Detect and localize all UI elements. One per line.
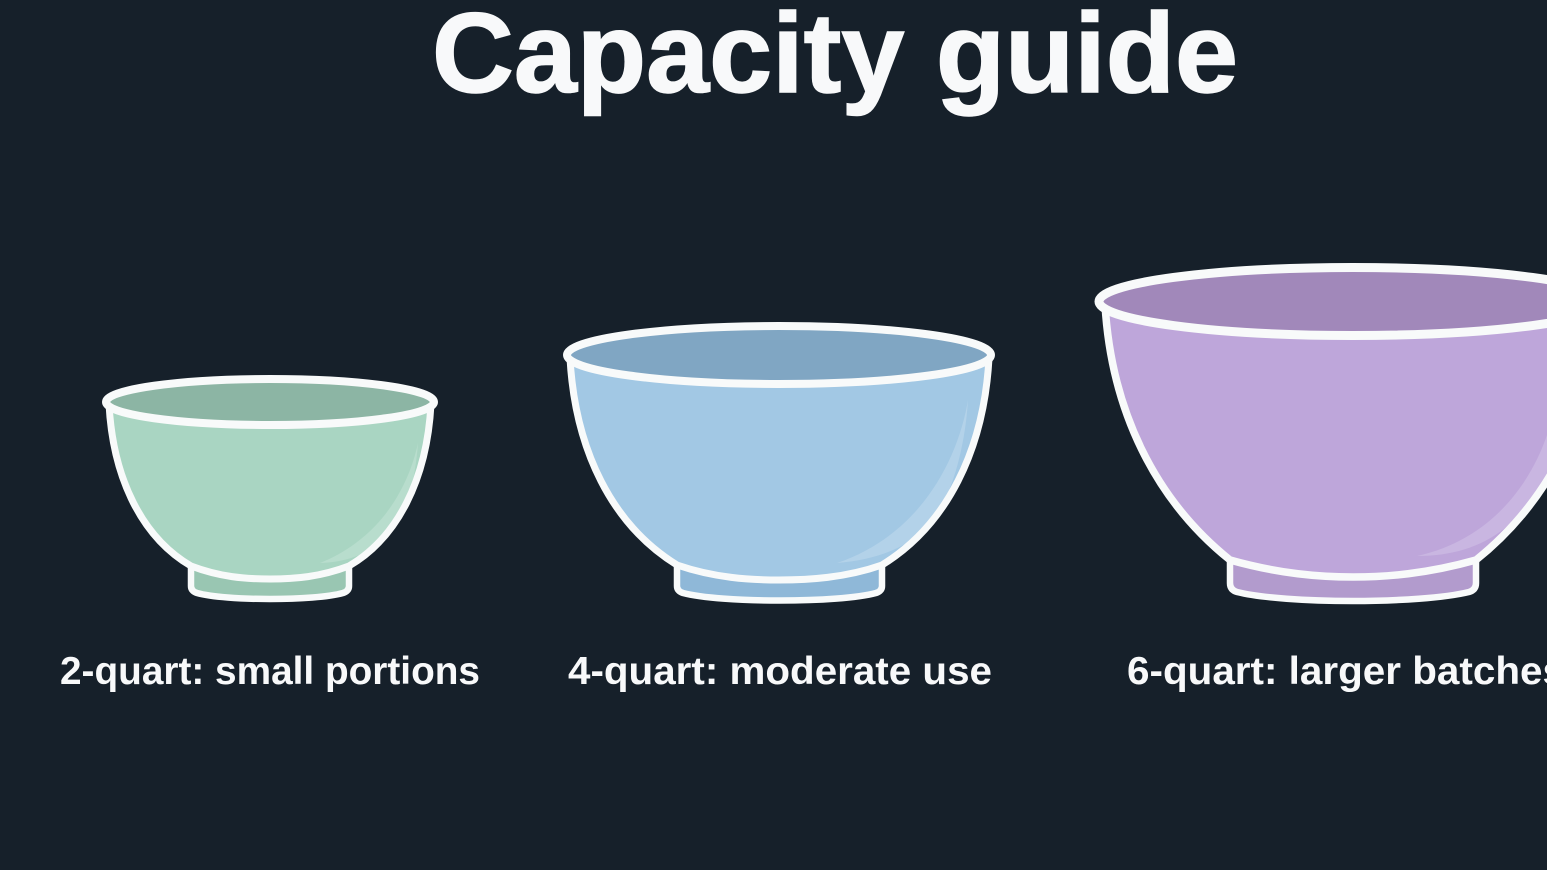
bowl: 6-quart purple, cropped at the right edge: [1099, 268, 1547, 601]
label: 6-quart: 6-quart: larger batches: [1127, 650, 1547, 693]
bowl: 4-quart blue: [567, 326, 991, 600]
label: 2-quart: 2-quart: small portions: [60, 650, 480, 693]
bowl: 2-quart green: [106, 379, 434, 599]
label: 4-quart: 4-quart: moderate use: [568, 650, 992, 693]
